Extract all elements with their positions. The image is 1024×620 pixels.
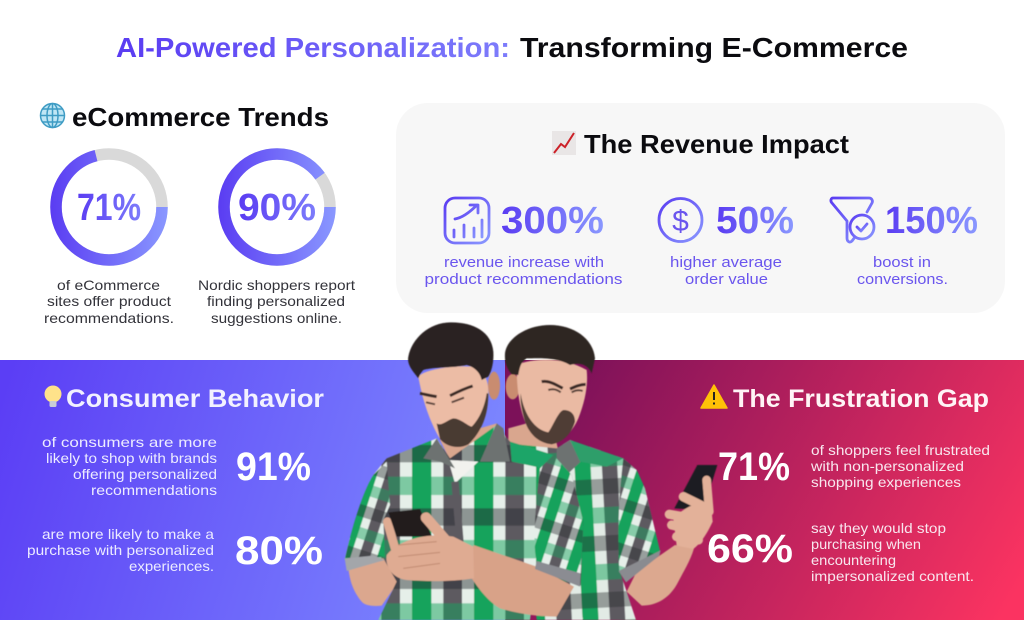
- label: conversions: [857, 255, 948, 288]
- caption: 71%: of eCommerce: [57, 277, 160, 293]
- thumb behind phone: [387, 522, 395, 548]
- shirt: [345, 425, 583, 620]
- stat: 80%: 80%: [235, 529, 323, 573]
- stat: 50%: 50%: [716, 200, 794, 242]
- chart: 90% ring: [224, 154, 330, 260]
- stat: 66%: 66%: [707, 527, 793, 571]
- label: revenue increase: [424, 255, 622, 288]
- heading: The Revenue Impact: The Revenue Impact: [584, 129, 849, 159]
- label: order value: [670, 255, 782, 288]
- text: 80% description: are more likely to make a: [42, 526, 214, 542]
- illustration: two men with phones: [345, 322, 717, 620]
- text: 91% description: of consumers are more: [42, 434, 217, 450]
- shirt: [507, 440, 660, 620]
- icon: warning: [701, 385, 727, 408]
- icon: globe: [40, 104, 64, 128]
- label: conversions: conversions.: [857, 272, 948, 288]
- heading: The Frustration Gap: The Frustration Gap: [733, 385, 989, 413]
- caption: 90%: finding personalized: [207, 293, 345, 309]
- ear: [488, 372, 500, 400]
- panel: The Frustration Gap: [505, 360, 1024, 620]
- caption: 90%: suggestions online.: [211, 310, 342, 326]
- label: revenue increase: product recommendations: [424, 272, 622, 288]
- text: 80% description: experiences.: [129, 558, 214, 574]
- arm and phone: [627, 465, 717, 606]
- beard: [521, 393, 575, 444]
- text: 66% description: purchasing when: [811, 536, 921, 552]
- text: 66% description: say they would stop: [811, 520, 946, 536]
- text: 91% description: [42, 434, 217, 498]
- sleeve: [618, 458, 660, 572]
- text: 80% description: [27, 526, 214, 574]
- right sleeve cuff: [535, 560, 581, 587]
- text: 66% description: encountering: [811, 552, 896, 568]
- text: 71% description: [810, 442, 990, 490]
- caption: 90%: [198, 277, 355, 326]
- caption: 71%: sites offer product: [47, 293, 171, 309]
- panel: eCommerce Trends: [40, 102, 355, 326]
- stat: 300%: 300%: [501, 200, 604, 242]
- heading: eCommerce Trends: eCommerce Trends: [72, 102, 329, 132]
- chart: 71% ring: [56, 154, 162, 260]
- label: revenue increase: revenue increase with: [444, 255, 604, 271]
- text: 71% description: shopping experiences: [811, 474, 961, 490]
- undershirt: [448, 460, 478, 483]
- hair: [505, 325, 595, 375]
- text: 91% description: likely to shop with brands: [46, 450, 217, 466]
- caption: 90%: Nordic shoppers report: [198, 277, 355, 293]
- caption: 71%: recommendations.: [44, 310, 174, 326]
- panel: The Revenue Impact: [396, 103, 1005, 313]
- right forearm: [472, 545, 574, 617]
- icon: dollar: $: [672, 205, 689, 238]
- label: order value: order value: [685, 272, 768, 288]
- left forearm: [348, 557, 398, 606]
- icon: dollar: [659, 198, 702, 242]
- stat: 91%: 91%: [236, 445, 311, 489]
- hair: [408, 322, 493, 380]
- label: conversions: boost in: [873, 255, 931, 271]
- left sleeve: [345, 462, 390, 559]
- placket: [455, 482, 460, 542]
- icon: funnel with check: [831, 198, 874, 242]
- neck: [440, 423, 498, 467]
- chart: 90% ring: 90%: [238, 187, 316, 229]
- icon: light bulb: [44, 386, 62, 407]
- figure: front man: [345, 322, 583, 620]
- text: 71% description: of shoppers feel frustrated: [811, 442, 990, 458]
- text: 80% description: purchase with personalized: [27, 542, 214, 558]
- label: order value: higher average: [670, 255, 782, 271]
- beard: [437, 393, 488, 447]
- caption: 71%: [44, 277, 174, 326]
- figure: back man: [505, 325, 717, 620]
- brows and eyes: [542, 381, 586, 389]
- face: [418, 366, 488, 446]
- heading: Consumer Behavior: Consumer Behavior: [66, 385, 324, 413]
- text: 91% description: recommendations: [91, 482, 217, 498]
- stat: 71%: 71%: [718, 445, 790, 489]
- phone: [388, 509, 432, 537]
- chart: 71% ring: 71%: [77, 187, 141, 229]
- ear: [506, 374, 520, 399]
- title: [116, 32, 908, 63]
- text: 71% description: with non-personalized: [810, 458, 964, 474]
- stat: 150%: 150%: [885, 200, 978, 242]
- title: AI-Powered Personalization:: [116, 32, 510, 63]
- collar: [423, 423, 510, 468]
- panel: Consumer Behavior: [0, 360, 520, 620]
- title: Transforming E-Commerce: [520, 32, 908, 63]
- hands: [386, 535, 474, 581]
- neck: [508, 423, 560, 458]
- text: 91% description: offering personalized: [73, 466, 217, 482]
- icon: chart emoji: [552, 131, 576, 155]
- brows: [420, 386, 473, 397]
- icon: growth chart: [445, 198, 489, 243]
- text: 66% description: [811, 520, 974, 584]
- text: 66% description: impersonalized content.: [811, 568, 974, 584]
- face: [517, 360, 587, 444]
